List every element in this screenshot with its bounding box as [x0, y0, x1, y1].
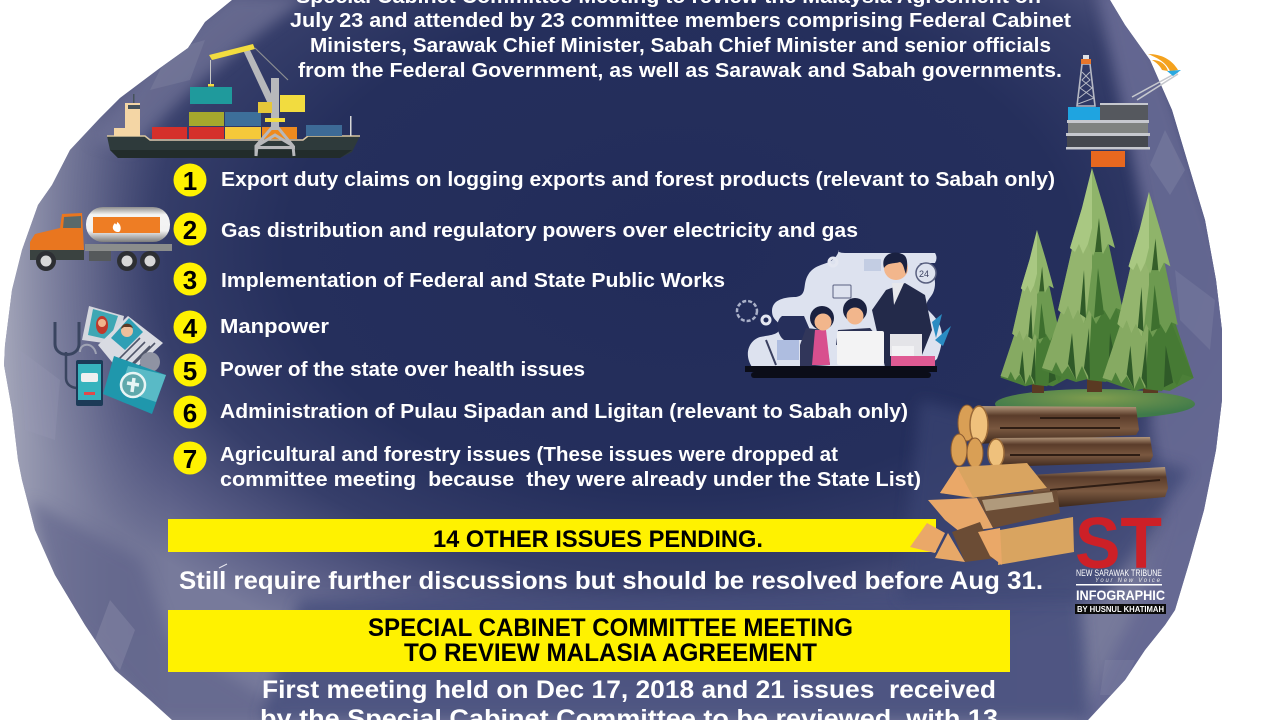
icon: gas tanker truck: [30, 207, 172, 271]
intro text block: [290, 0, 1071, 82]
list item 4: [174, 310, 329, 344]
icon: offshore oil rig with flame: [1066, 54, 1181, 167]
panel: 14 other issues banner: 14 OTHER ISSUES PENDING.: [433, 526, 763, 553]
list item 5: Power of the state over health issues: [220, 359, 585, 381]
intro text block: July 23 and attended by 23 committee members comprising Federal Cabinet: [290, 10, 1071, 32]
intro text block: Ministers, Sarawak Chief Minister, Sabah Chief Minister and senior officials: [310, 35, 1051, 57]
panel: special cabinet committee heading: [168, 610, 1010, 672]
text: further discussions note: Still require further discussions but should be resolved before Aug 31.: [179, 567, 1043, 595]
list item 2: 2: [183, 215, 197, 245]
list item 7: committee meeting because they were already under the State List): [220, 469, 921, 491]
icon: container ship with crane: [107, 44, 360, 158]
list item 6: [174, 396, 908, 428]
logo: ST New Sarawak Tribune infographic credit: INFOGRAPHIC: [1076, 588, 1165, 603]
text: first meeting summary: First meeting held on Dec 17, 2018 and 21 issues received: [262, 676, 996, 704]
list item 1: Export duty claims on logging exports and forest products (relevant to Sabah only): [221, 169, 1055, 191]
list item 2: Gas distribution and regulatory powers over electricity and gas: [221, 220, 858, 242]
list item 6: 6: [183, 398, 197, 428]
list item 3: Implementation of Federal and State Public Works: [221, 270, 725, 292]
logo: ST New Sarawak Tribune infographic credit: Your New Voice: [1095, 578, 1161, 584]
icon: office team at a desk: [737, 250, 951, 378]
logo: ST New Sarawak Tribune infographic credit: ST: [1075, 504, 1162, 584]
icon: hill: [995, 389, 1195, 419]
icon: pine trees: [1000, 168, 1194, 393]
panel: special cabinet committee heading: SPECIAL CABINET COMMITTEE MEETING: [368, 614, 853, 642]
panel: special cabinet committee heading: TO REVIEW MALASIA AGREEMENT: [404, 639, 817, 667]
list item 5: 5: [183, 356, 197, 386]
intro text block: from the Federal Government, as well as Sarawak and Sabah governments.: [298, 60, 1062, 82]
icon: office team at a desk: 24: [919, 269, 929, 279]
list item 1: 1: [183, 166, 197, 196]
logo: ST New Sarawak Tribune infographic credit: BY HUSNUL KHATIMAH: [1077, 605, 1164, 614]
list item 7: Agricultural and forestry issues (These issues were dropped at: [220, 444, 838, 466]
icon: stacked timber logs: [910, 405, 1168, 565]
list item 6: Administration of Pulau Sipadan and Ligitan (relevant to Sabah only): [220, 401, 908, 423]
list item 7: 7: [183, 444, 197, 474]
list item 2: [174, 212, 858, 246]
panel: 14 other issues banner: [168, 519, 936, 553]
list item 4: Manpower: [220, 316, 329, 338]
text: first meeting summary: [260, 676, 998, 720]
list item 4: 4: [183, 313, 198, 343]
list item 1: [174, 164, 1055, 196]
list item 5: [174, 354, 585, 386]
list item 3: 3: [183, 265, 197, 295]
logo: ST New Sarawak Tribune infographic credit: NEW SARAWAK TRIBUNE: [1076, 568, 1162, 578]
list item 3: [174, 262, 725, 296]
list item 7: [174, 442, 921, 491]
icon: medical records, stethoscope and phone: [55, 306, 166, 414]
